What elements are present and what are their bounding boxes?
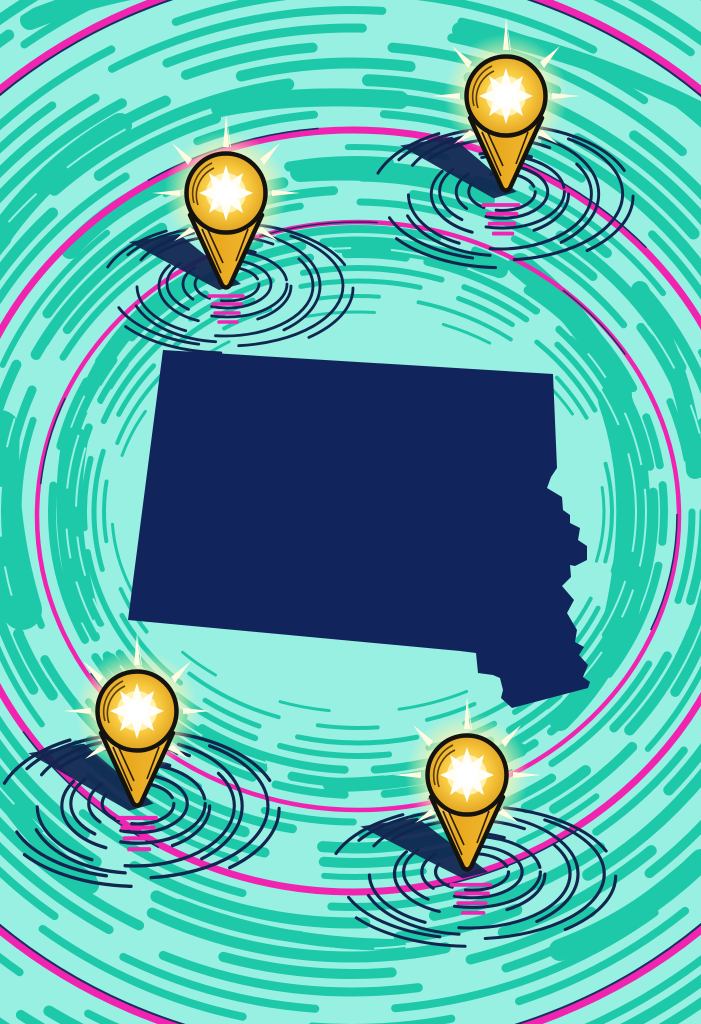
teal brush blobs: inner solid arcs [69, 245, 633, 785]
pin: bottom left [63, 631, 211, 806]
pin: bottom right [393, 695, 541, 870]
teal brush swirl: inner band [52, 229, 664, 795]
ripple: top left pin [101, 223, 353, 353]
state silhouette [128, 350, 590, 708]
pin: top right [432, 16, 580, 190]
ripple: top right pin [371, 125, 633, 268]
ripple: bottom right pin [328, 806, 616, 946]
pin: top left [152, 113, 300, 288]
teal brush swirl: middle band [0, 147, 701, 877]
ripple: bottom left pin [0, 730, 279, 886]
